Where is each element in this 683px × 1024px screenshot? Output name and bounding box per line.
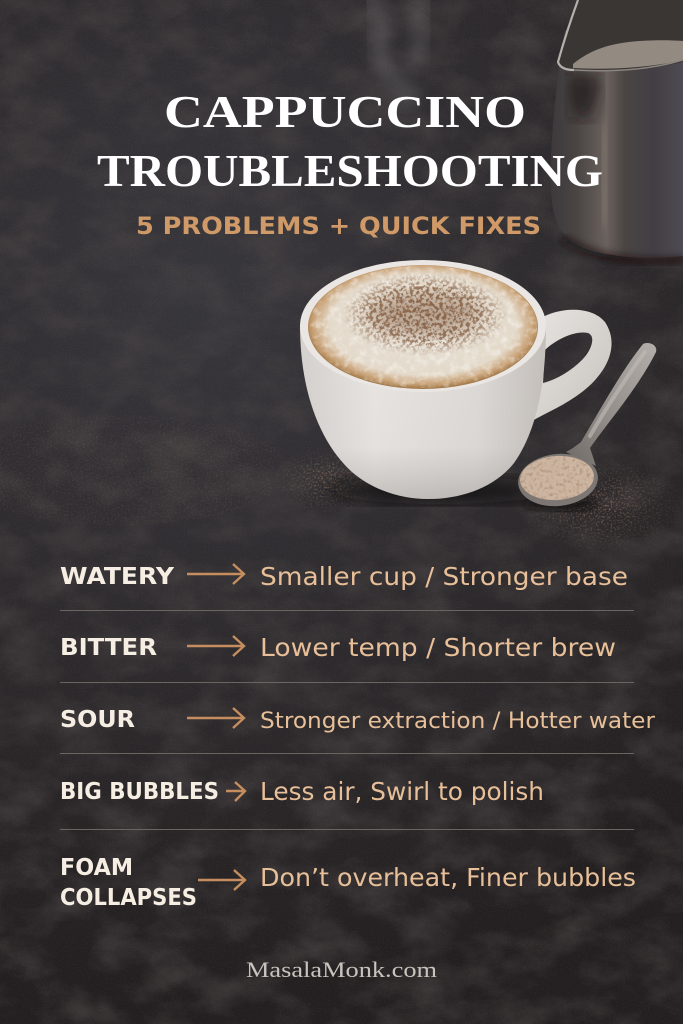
arrow [198,870,245,890]
row: foam collapses: FOAM [60,855,133,881]
row: bitter [60,633,616,662]
subtitle: 5 PROBLEMS + QUICK FIXES [136,212,541,240]
row: watery: WATERY [60,564,174,590]
arrow [187,564,244,584]
illustration: cappuccino cup [300,260,612,504]
coffee foam [305,262,541,392]
divider [60,752,634,754]
row: foam collapses: COLLAPSES [60,885,197,911]
cup shadow [328,476,552,504]
title [97,86,603,196]
row: sour: SOUR [60,707,135,733]
row: big bubbles: Less air, Swirl to polish [260,777,544,806]
cup handle [530,310,612,422]
row: sour: Stronger extraction / Hotter water [260,708,656,734]
icon: steel milk pitcher [551,0,683,263]
title: TROUBLESHOOTING [97,145,603,196]
footer: website: MasalaMonk.com [246,957,437,982]
cup rim [300,260,546,392]
row: watery: Smaller cup / Stronger base [260,562,628,591]
arrow [187,636,244,656]
cup body [300,325,546,499]
row: bitter: Lower temp / Shorter brew [260,633,616,662]
row: sour [60,707,656,734]
divider [60,682,634,684]
icon: steam rising from cup [372,0,425,104]
arrow [187,708,244,728]
title: CAPPUCCINO [164,86,526,137]
arrow [226,782,245,801]
row: foam collapses [60,855,636,911]
row: bitter: BITTER [60,635,157,661]
row: watery [60,562,628,591]
row: foam collapses: Don’t overheat, Finer bubbles [260,863,636,892]
icon: spoon with cocoa powder [516,343,656,511]
row: big bubbles [60,777,544,806]
row: big bubbles: BIG BUBBLES [60,779,219,805]
divider [60,610,634,612]
divider [60,828,634,830]
